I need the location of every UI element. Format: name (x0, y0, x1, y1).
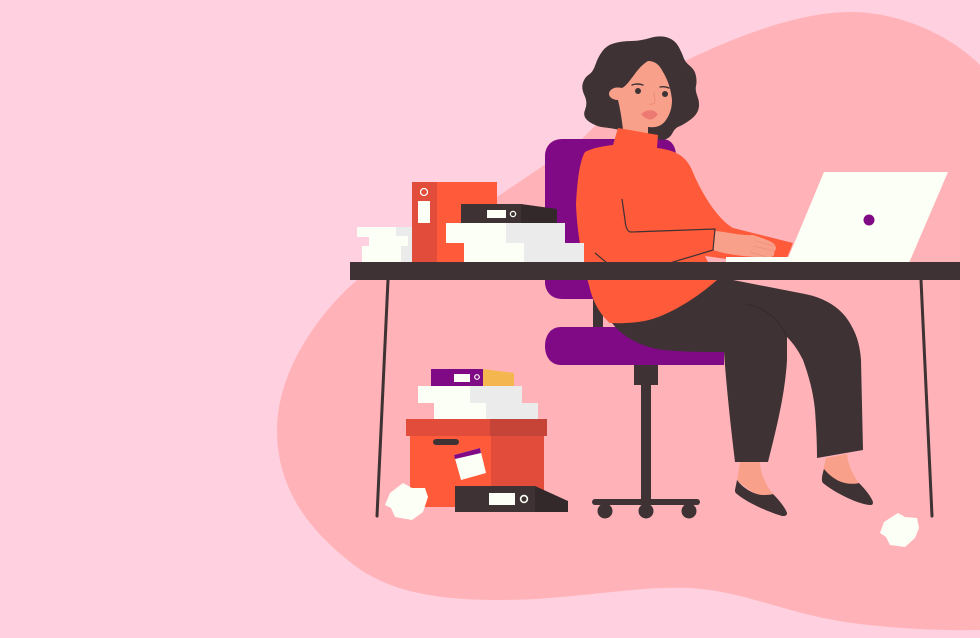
dark binder on floor (455, 486, 568, 512)
laptop base (726, 257, 796, 263)
chair seat (545, 327, 724, 365)
box body (410, 436, 491, 507)
eyes (635, 88, 668, 97)
hand (713, 231, 776, 257)
office chair (545, 139, 724, 518)
sticky note (454, 448, 486, 480)
nose (649, 92, 655, 104)
chair back support (593, 298, 603, 328)
background blob (277, 12, 980, 630)
desk top (350, 262, 960, 280)
storage box with files (406, 369, 568, 512)
left ankle (737, 462, 773, 497)
large paper stack on desk (446, 223, 584, 263)
neck and face (609, 61, 672, 134)
desk (350, 262, 960, 516)
lips (641, 110, 658, 120)
box lid (406, 419, 490, 436)
papers on box (418, 386, 538, 419)
sweater (576, 128, 793, 323)
sleeve and body fold lines (595, 199, 715, 263)
small paper stack on desk (357, 227, 412, 263)
right ankle (823, 454, 859, 486)
dark binder on desk (461, 204, 557, 223)
chair back (545, 139, 676, 299)
right shoe (822, 469, 873, 505)
red binder on desk (412, 182, 497, 263)
crumpled paper right (880, 513, 919, 547)
crumpled paper left (385, 483, 428, 520)
purple binder (431, 369, 514, 386)
laptop logo dot (864, 214, 874, 226)
finger lines (750, 241, 775, 257)
desk legs (377, 280, 932, 516)
chair wheels (598, 504, 696, 518)
laptop screen (786, 172, 948, 263)
chair base (592, 499, 700, 505)
woman (576, 36, 873, 516)
chair column (634, 365, 658, 499)
trousers (612, 280, 863, 462)
eyebrows (632, 84, 669, 88)
box handle (433, 439, 459, 445)
hair (582, 36, 699, 140)
laptop (726, 172, 948, 263)
left shoe (735, 480, 787, 516)
trouser knee crease (745, 304, 787, 337)
